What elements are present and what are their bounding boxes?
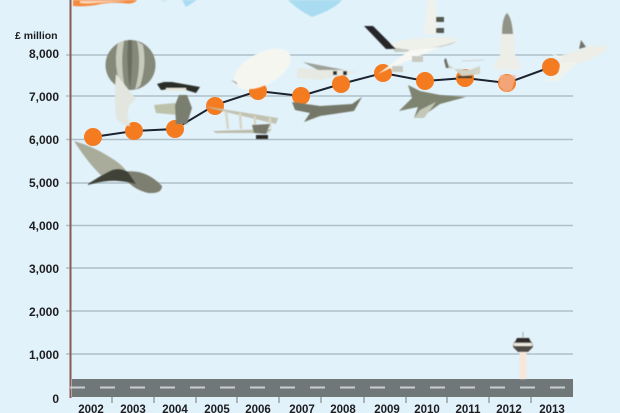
y axis unit label: £ million (15, 30, 58, 42)
icon: helicopter 2011 (444, 58, 484, 78)
line chart: data points (84, 58, 560, 146)
y axis labels: 0 (52, 392, 59, 406)
flame banner at top of axis (73, 0, 137, 6)
y axis labels: 1,000 (29, 348, 59, 362)
sky decoration: clouds at the top (160, 0, 342, 17)
gridlines (66, 55, 573, 354)
icon: biplane 2005 (203, 106, 278, 139)
y axis labels: 7,000 (29, 90, 59, 104)
runway baseline (70, 379, 573, 397)
icon: hot air balloon 2003 (106, 40, 156, 126)
icon: propeller airliner 2008 (297, 62, 358, 80)
icon: space shuttle 2012 (493, 13, 522, 92)
line chart: trend line (93, 67, 551, 137)
x axis year labels (78, 404, 565, 413)
icon: spitfire 2007 (292, 97, 362, 122)
icon: airship 2006 (228, 40, 297, 98)
y axis labels: 8,000 (29, 47, 59, 61)
y axis labels: 2,000 (29, 305, 59, 319)
y axis labels (29, 47, 59, 406)
y axis labels: 5,000 (29, 176, 59, 190)
icon: control tower (513, 332, 533, 379)
icon: ornithopter wings 2002 (74, 141, 162, 193)
icon: business jet 2013 (544, 40, 606, 81)
icon: jumbo jet 2009 (364, 0, 457, 74)
y axis (70, 0, 72, 398)
icon: early flying machine 2004 (154, 82, 200, 124)
y axis labels: 4,000 (29, 219, 59, 233)
y axis labels: 6,000 (29, 133, 59, 147)
y axis labels: 3,000 (29, 262, 59, 276)
x axis ticks (112, 397, 531, 403)
icon: fighter jet 2010 (399, 85, 466, 118)
